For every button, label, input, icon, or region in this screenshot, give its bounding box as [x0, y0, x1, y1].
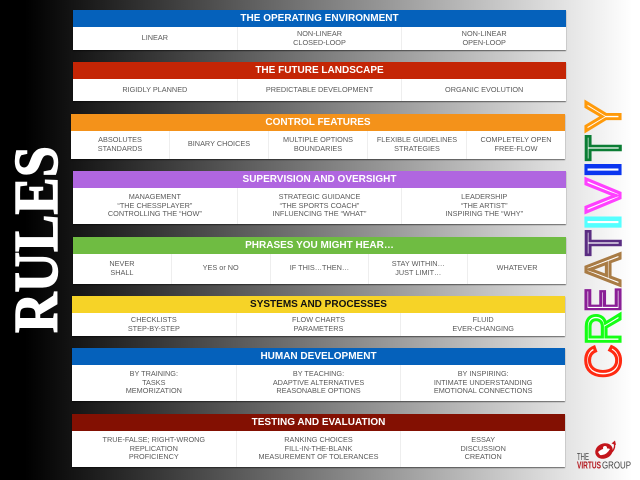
panel: phrases you might hear	[73, 236, 566, 284]
heading: human development	[72, 348, 565, 365]
letter E: E	[577, 288, 631, 312]
panel: systems and processes	[72, 296, 565, 336]
columns: phrases: JUST LIMIT…	[395, 268, 441, 277]
columns: development approaches: BY TRAINING:	[130, 369, 178, 378]
columns: control feature options: MULTIPLE OPTIONS	[283, 135, 353, 144]
columns: supervision styles: “THE SPORTS COACH”	[280, 201, 359, 210]
columns: control feature options: FLEXIBLE GUIDELINES	[377, 135, 457, 144]
heading: supervision and oversight	[73, 171, 566, 188]
columns: evaluation methods: CREATION	[465, 452, 502, 461]
columns: evaluation methods: TRUE-FALSE; RIGHT-WRONG	[103, 435, 205, 444]
columns: systems options: FLUID	[473, 315, 494, 324]
panel: control features	[71, 114, 565, 158]
columns: development approaches: REASONABLE OPTIONS	[276, 386, 361, 395]
columns: systems options	[72, 313, 565, 336]
columns: supervision styles: INSPIRING THE “WHY”	[445, 209, 523, 218]
heading: phrases you might hear	[73, 236, 566, 254]
columns: development approaches: BY TEACHING:	[293, 369, 344, 378]
heading: the operating environment	[73, 10, 566, 27]
heading: the future landscape	[73, 62, 566, 79]
columns: development approaches: INTIMATE UNDERSTANDING	[434, 378, 532, 387]
columns: development approaches: TASKS	[142, 378, 166, 387]
columns: operating environment options: OPEN-LOOP	[462, 38, 506, 46]
letter I: I	[576, 160, 630, 179]
columns: control feature options: FREE-FLOW	[494, 144, 537, 153]
letter T: T	[576, 230, 631, 256]
heading: human development: HUMAN DEVELOPMENT	[260, 351, 377, 362]
heading: supervision and oversight: SUPERVISION AND OVERSIGHT	[243, 174, 396, 185]
panel: human development	[72, 348, 565, 401]
logo text: virtus: VIRTUS	[577, 460, 601, 472]
columns: evaluation methods: MEASUREMENT OF TOLERANCES	[258, 452, 379, 461]
columns: supervision styles	[73, 188, 566, 224]
columns: supervision styles: LEADERSHIP	[461, 192, 507, 201]
columns: supervision styles: “THE CHESSPLAYER”	[117, 201, 192, 210]
columns: systems options: FLOW CHARTS	[292, 315, 345, 324]
columns: future landscape options	[73, 79, 566, 101]
columns: supervision styles: CONTROLLING THE “HOW”	[108, 209, 202, 218]
columns: phrases: NEVER	[109, 259, 134, 268]
columns: supervision styles: “THE ARTIST”	[461, 201, 508, 210]
columns: development approaches: ADAPTIVE ALTERNATIVES	[273, 378, 364, 387]
vertical title: creativity	[576, 100, 631, 378]
columns: development approaches	[72, 365, 565, 401]
columns: future landscape options: ORGANIC EVOLUTION	[445, 85, 523, 94]
columns: evaluation methods: PROFICIENCY	[129, 452, 179, 461]
columns: systems options: PARAMETERS	[294, 324, 343, 332]
columns: development approaches: EMOTIONAL CONNECTIONS	[434, 386, 532, 395]
letter V: V	[576, 179, 631, 212]
columns: development approaches: BY INSPIRING:	[458, 369, 509, 378]
columns: phrases: SHALL	[110, 268, 133, 277]
columns: evaluation methods: REPLICATION	[130, 444, 178, 453]
letter T: T	[576, 135, 631, 161]
columns: operating environment options: LINEAR	[142, 33, 168, 42]
letter I: I	[576, 212, 630, 232]
logo text: group: GROUP	[602, 460, 631, 472]
panel: supervision and oversight	[73, 171, 566, 224]
columns: systems options: STEP-BY-STEP	[128, 324, 180, 332]
columns: evaluation methods	[72, 431, 565, 467]
heading: testing and evaluation: TESTING AND EVALUATION	[252, 417, 385, 428]
columns: future landscape options: RIGIDLY PLANNED	[122, 85, 187, 94]
letter A: A	[576, 253, 631, 285]
heading: phrases you might hear: PHRASES YOU MIGHT HEAR…	[245, 240, 394, 250]
columns: operating environment options: CLOSED-LOOP	[293, 38, 346, 46]
letter Y: Y	[577, 101, 631, 132]
columns: phrases: WHATEVER	[497, 263, 537, 272]
columns: control feature options: STANDARDS	[98, 144, 142, 153]
columns: phrases: STAY WITHIN…	[392, 259, 445, 268]
columns: control feature options: COMPLETELY OPEN	[480, 135, 552, 144]
columns: phrases: IF THIS…THEN…	[290, 263, 349, 272]
columns: control feature options: BOUNDARIES	[294, 144, 342, 153]
heading: systems and processes: SYSTEMS AND PROCESSES	[250, 299, 387, 310]
columns: evaluation methods: DISCUSSION	[460, 444, 506, 453]
columns: control feature options: BINARY CHOICES	[188, 139, 250, 148]
heading: the operating environment: THE OPERATING ENVIRONMENT	[240, 13, 399, 24]
columns: evaluation methods: RANKING CHOICES	[284, 435, 353, 444]
columns: evaluation methods: FILL-IN-THE-BLANK	[285, 444, 352, 453]
columns: phrases	[73, 254, 566, 284]
columns: operating environment options	[73, 27, 566, 50]
columns: development approaches: MEMORIZATION	[126, 386, 182, 395]
panel: the future landscape	[73, 62, 566, 101]
icon: red globe with arrow	[593, 440, 616, 462]
letter R: R	[577, 312, 631, 345]
columns: supervision styles: MANAGEMENT	[129, 192, 181, 201]
columns: control feature options: ABSOLUTES	[98, 135, 142, 144]
letter C: C	[577, 345, 631, 378]
heading: the future landscape: THE FUTURE LANDSCAPE	[255, 65, 384, 76]
panel: testing and evaluation	[72, 414, 565, 467]
heading: control features: CONTROL FEATURES	[265, 117, 371, 128]
logo: the virtus group	[577, 440, 631, 472]
columns: phrases: YES or NO	[203, 263, 239, 272]
logo text: the: THE	[577, 452, 589, 463]
panel: the operating environment	[73, 10, 566, 50]
columns: future landscape options: PREDICTABLE DEVELOPMENT	[266, 85, 373, 94]
vertical title: rules: RULES	[3, 146, 71, 333]
columns: systems options: EVER-CHANGING	[452, 324, 514, 332]
heading: testing and evaluation	[72, 414, 565, 431]
columns: control feature options: STRATEGIES	[394, 144, 440, 153]
columns: operating environment options: NON-LINEAR	[297, 29, 342, 38]
columns: systems options: CHECKLISTS	[131, 315, 177, 324]
columns: control feature options	[71, 131, 565, 158]
columns: supervision styles: INFLUENCING THE “WHAT”	[273, 209, 366, 218]
columns: supervision styles: STRATEGIC GUIDANCE	[279, 192, 360, 201]
columns: evaluation methods: ESSAY	[471, 435, 495, 444]
columns: operating environment options: NON-LINEAR	[462, 29, 507, 38]
heading: systems and processes	[72, 296, 565, 313]
heading: control features	[71, 114, 565, 131]
